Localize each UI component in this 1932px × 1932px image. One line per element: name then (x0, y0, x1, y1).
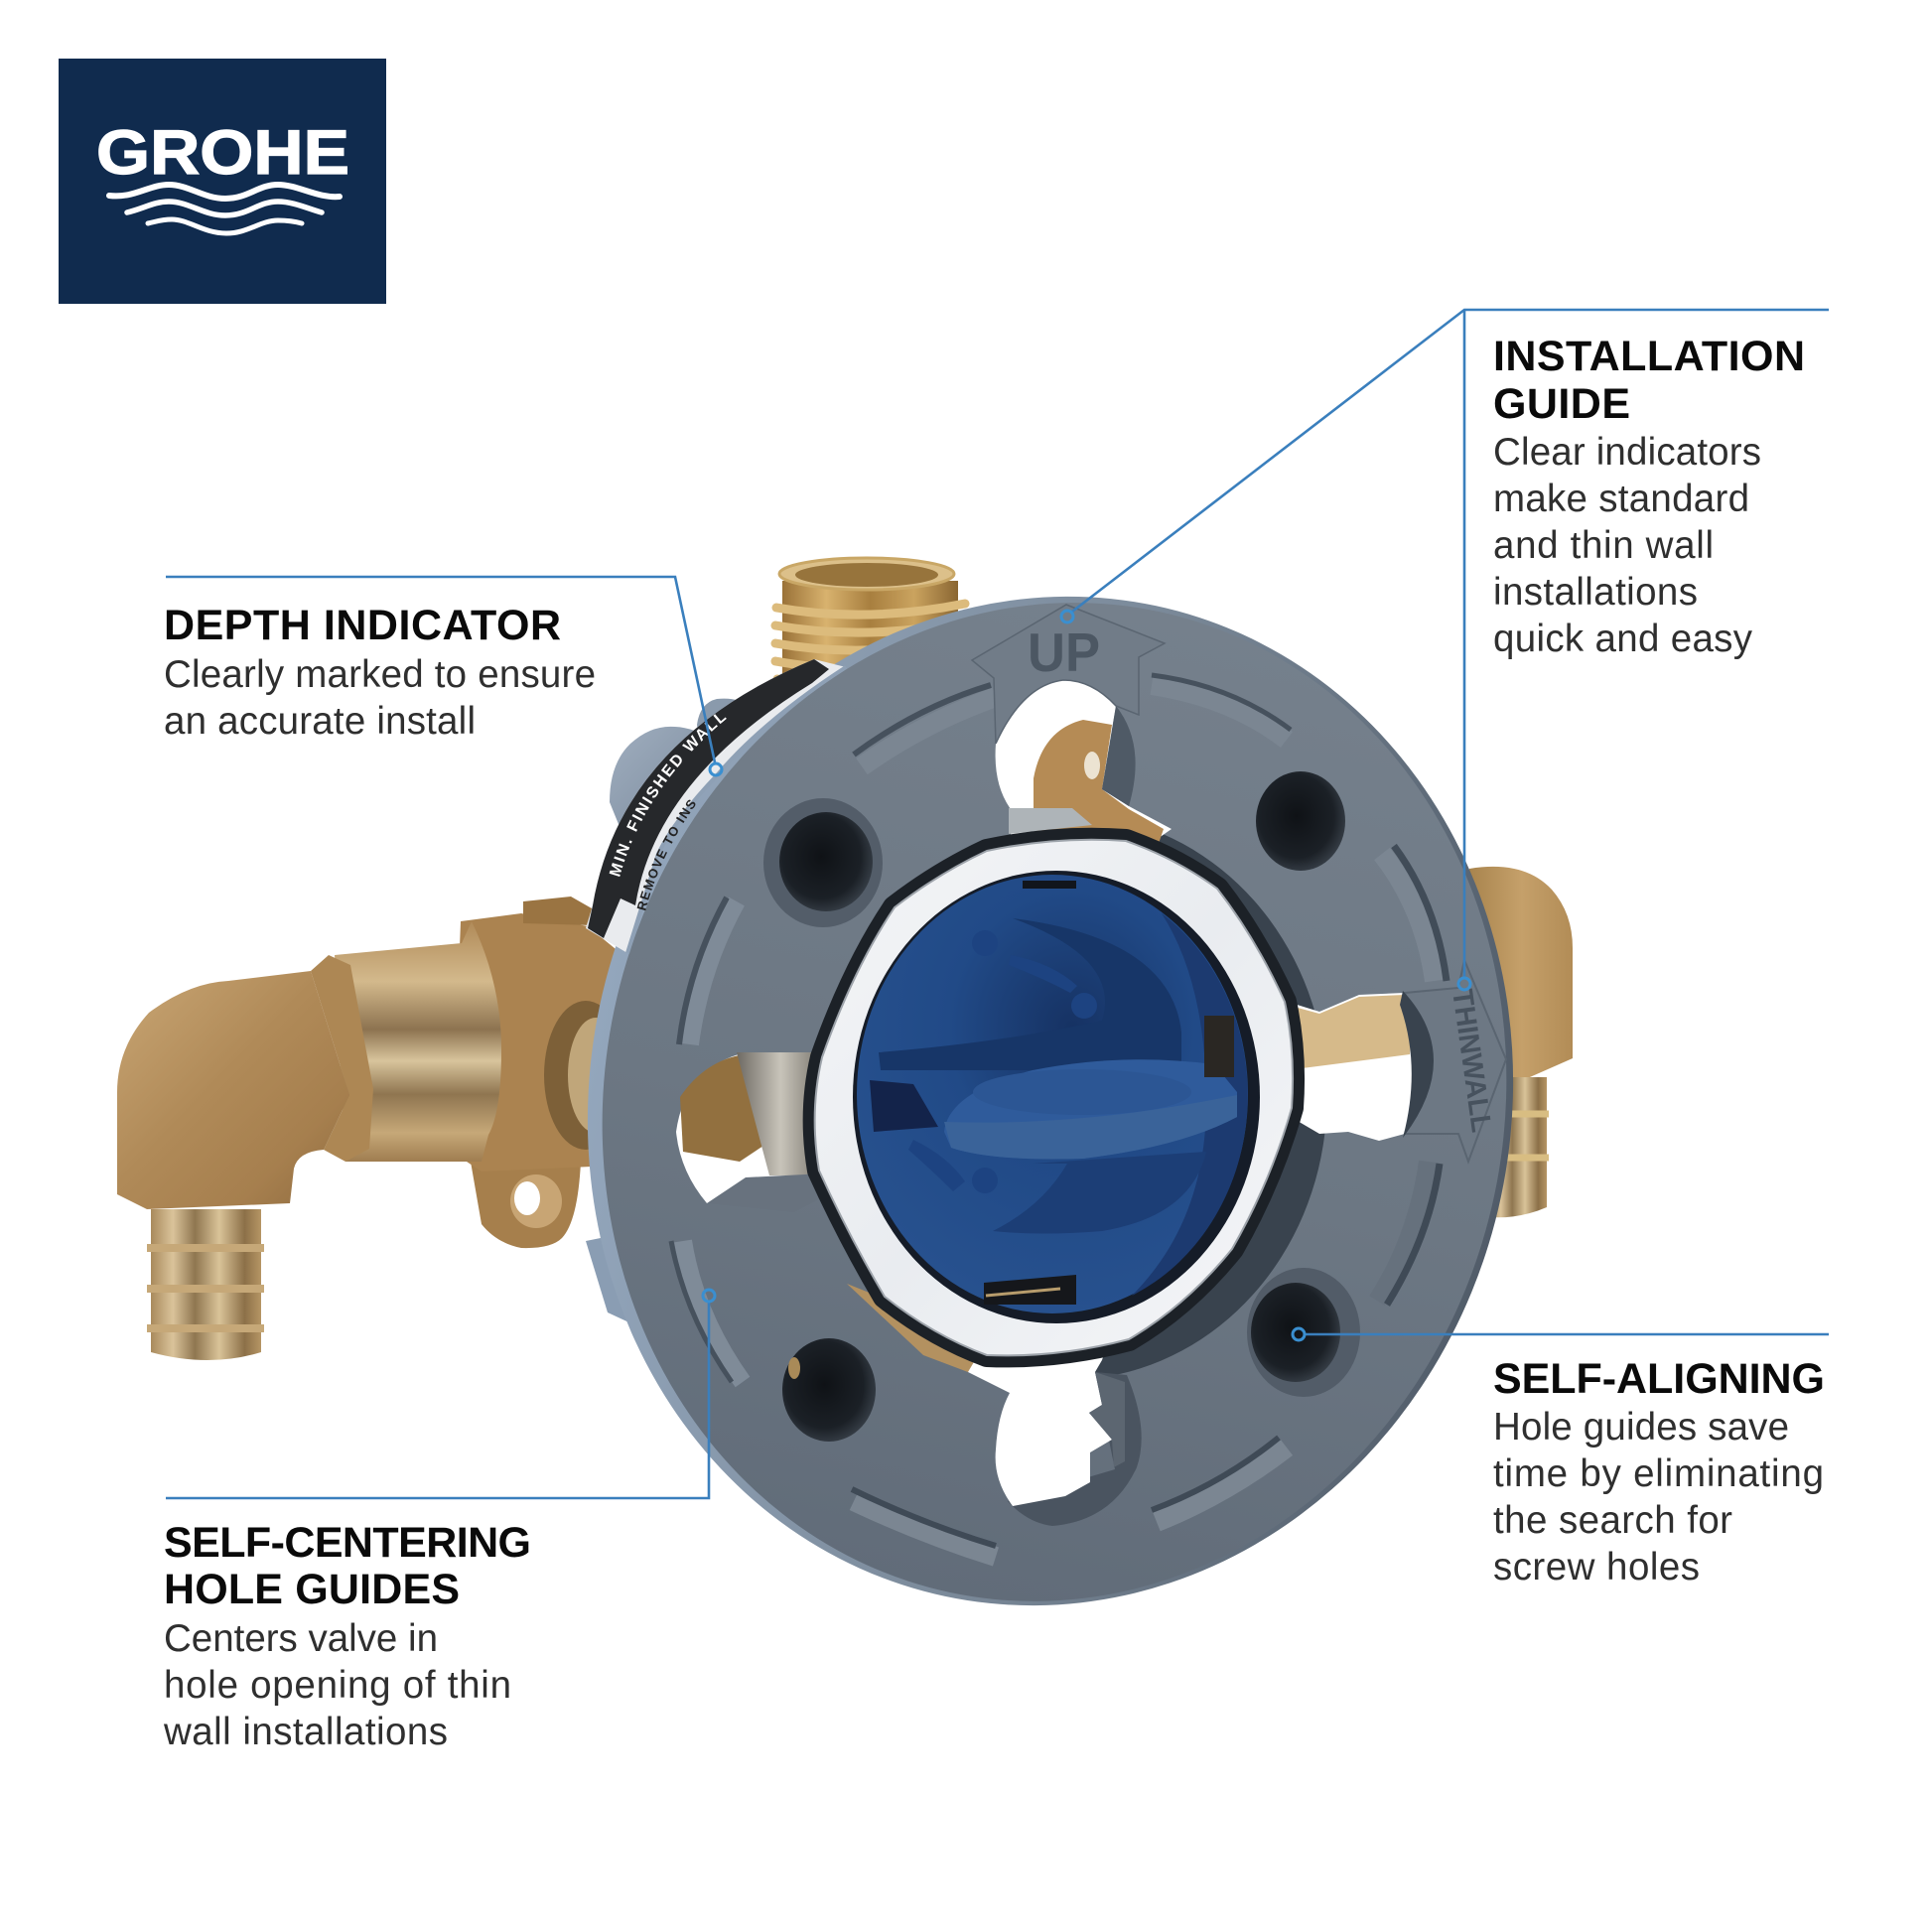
lower dome shadow (993, 1152, 1206, 1233)
heading: DEPTH INDICATOR (164, 602, 561, 649)
black gasket (815, 840, 1293, 1355)
body text (164, 653, 596, 743)
heading: SELF-CENTERING (164, 1519, 531, 1567)
product: shower valve illustration (117, 556, 1573, 1606)
right navy rim (1132, 913, 1248, 1296)
brass pipe (1287, 995, 1410, 1070)
body text: make standard (1493, 478, 1749, 520)
up arrow (972, 605, 1165, 744)
chrome hex nut (815, 840, 1293, 1355)
up lettering: UP (1028, 621, 1100, 683)
upper dome shadow (879, 918, 1181, 1070)
product: shower valve illustration: REMOVE TO INS (637, 800, 695, 911)
handle (944, 1059, 1237, 1160)
brass right elbow and barb (1459, 867, 1573, 1217)
body text (1493, 1406, 1824, 1588)
ring rim (494, 510, 1606, 1692)
heading (164, 1519, 531, 1613)
tab crescent (1102, 706, 1136, 806)
handle front face (944, 1095, 1237, 1160)
cap recess (853, 871, 1260, 1323)
brass threads (847, 1284, 978, 1372)
callout: installation guide (1061, 310, 1829, 990)
body text: hole opening of thin (164, 1664, 511, 1707)
screw hole: upper right (1256, 771, 1345, 871)
central opening inner wall (973, 826, 1327, 1378)
ear with screw hole (471, 1162, 581, 1248)
leader line (1293, 1328, 1829, 1340)
remove-to-install text (645, 764, 730, 911)
metal clips (1023, 881, 1076, 889)
barb fitting (147, 1209, 264, 1360)
leader lines (1061, 310, 1829, 990)
heading: HOLE GUIDES (164, 1566, 460, 1613)
left keyhole opening (676, 1052, 824, 1212)
logo wordmark: GROHE (96, 118, 349, 188)
ring face (510, 518, 1598, 1686)
body text: Centers valve in (164, 1617, 438, 1660)
ring side tab (586, 1231, 635, 1325)
slots and dimples (908, 930, 1097, 1193)
body text: screw holes (1493, 1546, 1700, 1588)
brass left elbow assembly (117, 897, 627, 1360)
leader line (166, 577, 722, 775)
body text: an accurate install (164, 700, 476, 743)
silver stem (737, 1052, 824, 1175)
strip text (620, 685, 772, 878)
depth label strip (586, 659, 844, 953)
thin wall lettering: THINWALL (1446, 988, 1497, 1135)
collar (311, 955, 373, 1162)
dark side tab (1089, 1372, 1125, 1467)
body text: Clearly marked to ensure (164, 653, 596, 696)
body text (1493, 431, 1761, 660)
nub (523, 897, 592, 925)
smooth cylinder (335, 921, 501, 1162)
right keyhole opening (1287, 993, 1412, 1141)
handle ring opening (973, 1069, 1191, 1115)
callout: self-centering hole guides (163, 1290, 715, 1753)
body text: wall installations (163, 1711, 448, 1753)
bottom tab (707, 1173, 824, 1212)
heading: GUIDE (1493, 380, 1630, 428)
screw hole: lower left (782, 1338, 876, 1442)
body text: installations (1493, 571, 1698, 614)
blue cap (857, 875, 1248, 1313)
heading: INSTALLATION (1493, 333, 1805, 380)
logo: GROHE (59, 59, 386, 304)
crescent of right keyhole (1400, 991, 1434, 1138)
top keyhole opening (996, 680, 1172, 864)
logo waves (109, 185, 340, 233)
valve body (452, 913, 621, 1172)
elbow (117, 971, 349, 1209)
depth label strip: MIN. FINISHED WALL (610, 714, 727, 877)
dark block (870, 1080, 938, 1132)
brass threaded top outlet (775, 558, 965, 700)
heading (1493, 333, 1805, 428)
heading: SELF-ALIGNING (1493, 1355, 1825, 1403)
leader line (166, 1290, 715, 1498)
body text: time by eliminating (1493, 1452, 1824, 1495)
bottom keyhole opening (847, 1284, 1142, 1526)
brass lug (1034, 720, 1164, 864)
body text: the search for (1493, 1499, 1732, 1542)
grey plugs (610, 699, 747, 829)
screw hole: upper left (763, 798, 883, 927)
body text (163, 1617, 511, 1753)
screw hole: lower right (1247, 1268, 1360, 1397)
body text: and thin wall (1493, 524, 1714, 567)
body text: Clear indicators (1493, 431, 1761, 474)
body text: quick and easy (1493, 618, 1753, 660)
callout: self-aligning (1293, 1328, 1829, 1588)
body text: Hole guides save (1493, 1406, 1789, 1449)
callout: depth indicator (164, 577, 722, 775)
silver sleeve (1009, 808, 1092, 834)
thin wall arrow (1405, 960, 1506, 1162)
inner port (544, 1001, 627, 1150)
raised arc ribs on ring (671, 675, 1447, 1557)
